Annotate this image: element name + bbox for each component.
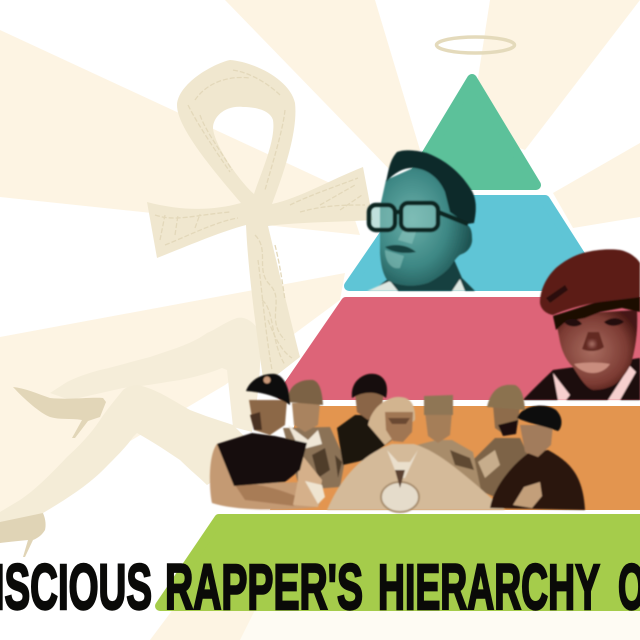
- person: right in camo cap, rear: [473, 385, 535, 497]
- jacket: [523, 358, 640, 400]
- person: back in black beanie: [337, 374, 392, 465]
- glasses: [369, 203, 468, 230]
- pyramid tier: top green: [408, 79, 536, 185]
- upper leg: [50, 318, 261, 432]
- hair: [386, 150, 476, 224]
- mouth: [385, 245, 416, 253]
- pyramid tier: pink: [282, 302, 640, 395]
- upper shoe: [13, 387, 106, 438]
- nose: [582, 332, 604, 351]
- person: center in hoodie with clock: [327, 397, 505, 512]
- person: front left in sleeveless shirt: [210, 374, 325, 510]
- person: front right in black beret: [490, 406, 585, 510]
- portrait: man with red cap: [523, 249, 640, 400]
- person: second right in camo cap: [417, 395, 482, 500]
- ankh engraving: [155, 70, 365, 370]
- ankh: [147, 60, 373, 385]
- title: [0, 551, 640, 623]
- face: [380, 165, 472, 286]
- nose and cheek shading: [385, 230, 416, 268]
- pyramid tier: blue: [349, 200, 600, 286]
- person: back left in camo cap: [283, 380, 345, 490]
- halo: [436, 37, 514, 53]
- group photo: [210, 374, 585, 512]
- pyramid tier: orange: [270, 406, 640, 510]
- lips: [574, 362, 610, 373]
- lower leg: [0, 385, 260, 535]
- legs: [0, 318, 261, 557]
- pyramid tier: bottom green: [160, 519, 640, 606]
- eyes: [564, 318, 624, 326]
- neck and collar: [372, 255, 475, 291]
- clock necklace: [381, 482, 419, 512]
- cap: [540, 249, 640, 315]
- lower shoe: [0, 513, 46, 557]
- pink shirt collar: [553, 366, 636, 400]
- shadow below cap brim: [553, 296, 640, 330]
- title: RAPPER'S: [165, 551, 363, 623]
- face: [555, 310, 637, 390]
- portrait: man with glasses: [367, 150, 476, 291]
